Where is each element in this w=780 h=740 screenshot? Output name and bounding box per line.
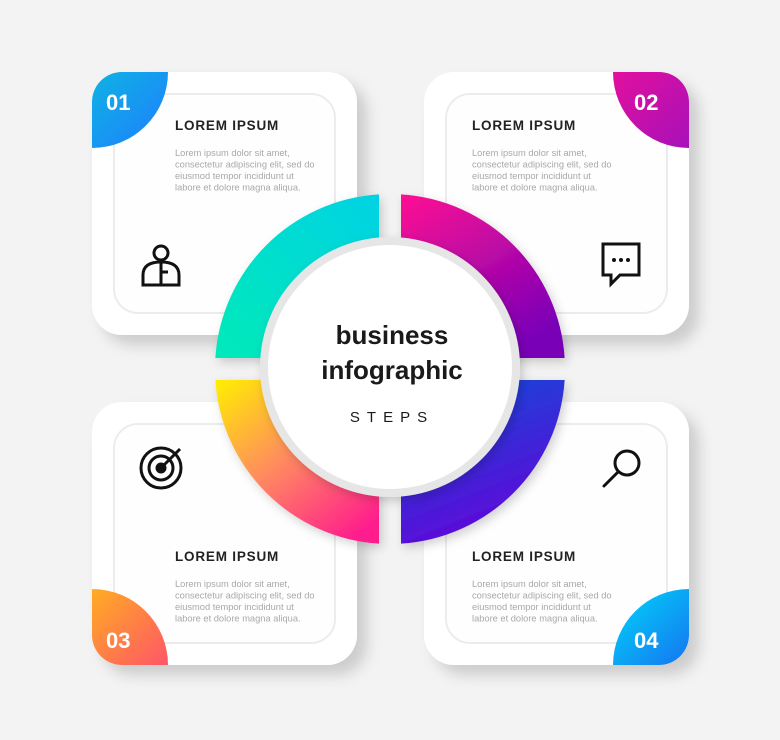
badge 02 — [613, 72, 689, 148]
body text 01: Lorem ipsum dolor sit amet, — [175, 148, 290, 158]
body text 03: Lorem ipsum dolor sit amet, — [175, 579, 290, 589]
heading 03: LOREM IPSUM — [175, 549, 279, 564]
body text 03: consectetur adipiscing elit, sed do — [175, 590, 315, 600]
body text 04: Lorem ipsum dolor sit amet, — [472, 579, 587, 589]
panel: card 04 — [424, 402, 704, 680]
heading 04: LOREM IPSUM — [472, 549, 576, 564]
badge 02: 02 — [634, 90, 658, 115]
chart: ring segments — [215, 194, 565, 544]
body text 02: Lorem ipsum dolor sit amet, — [472, 148, 587, 158]
center circle title: STEPS — [350, 409, 434, 426]
badge 01 — [92, 72, 168, 148]
icon: chat bubble — [603, 244, 639, 284]
body text 04: labore et dolore magna aliqua. — [472, 614, 598, 624]
body text 01: eiusmod tempor incididunt ut — [175, 171, 294, 181]
badge 04: 04 — [634, 628, 659, 653]
body text 03: labore et dolore magna aliqua. — [175, 614, 301, 624]
badge 03 — [92, 589, 168, 665]
panel: card 01 — [92, 72, 372, 350]
body text 04: consectetur adipiscing elit, sed do — [472, 590, 612, 600]
heading 01: LOREM IPSUM — [175, 118, 279, 133]
panel: card 03 — [92, 402, 372, 680]
badge 03: 03 — [106, 628, 130, 653]
body text 01: labore et dolore magna aliqua. — [175, 182, 301, 192]
body text 02: labore et dolore magna aliqua. — [472, 182, 598, 192]
body text 03: eiusmod tempor incididunt ut — [175, 602, 294, 612]
badge 04 — [613, 589, 689, 665]
center circle title: business — [336, 320, 448, 350]
center circle title: infographic — [321, 355, 463, 385]
badge 01: 01 — [106, 90, 130, 115]
body text 04: eiusmod tempor incididunt ut — [472, 602, 591, 612]
center circle title — [260, 237, 520, 497]
icon: target — [141, 448, 181, 488]
body text 02: consectetur adipiscing elit, sed do — [472, 160, 612, 170]
panel: card 02 — [424, 72, 704, 350]
icon: person — [143, 246, 179, 285]
heading 02: LOREM IPSUM — [472, 118, 576, 133]
icon: magnifier — [604, 451, 639, 486]
body text 01: consectetur adipiscing elit, sed do — [175, 160, 315, 170]
body text 02: eiusmod tempor incididunt ut — [472, 171, 591, 181]
